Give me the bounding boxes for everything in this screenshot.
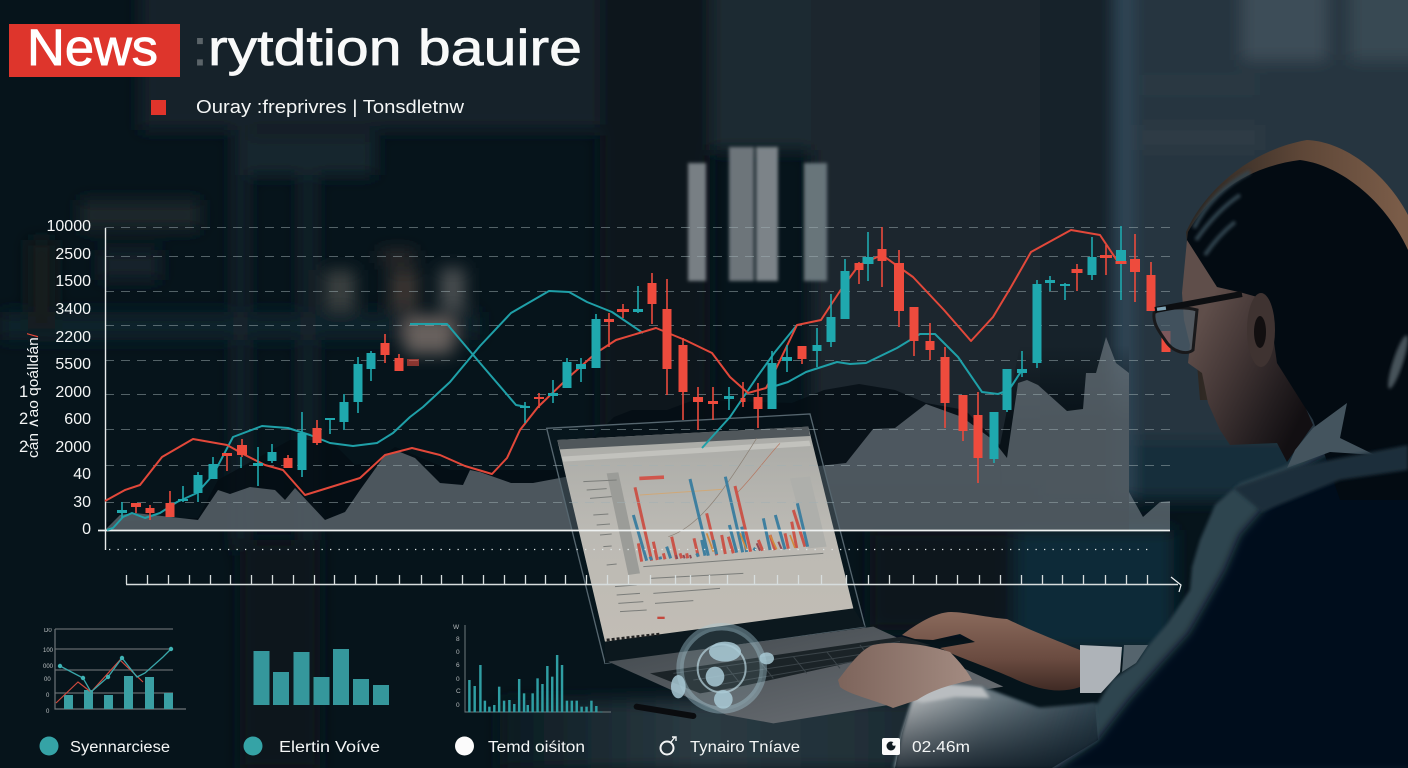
y axis labels: 2000 (55, 384, 91, 401)
laptop lid (547, 414, 865, 663)
mini chart: volume bars (254, 649, 389, 705)
y axis labels: 600 (64, 411, 91, 428)
glasses (1154, 294, 1242, 353)
mini chart: thin bars: 6 (456, 662, 460, 669)
mini chart: mixed bars and lines: 00 (44, 677, 51, 683)
y axis labels: 5500 (55, 356, 91, 373)
dark chart shadow area (105, 345, 1129, 530)
teal candle bodies (117, 250, 1126, 513)
red trend line (105, 230, 1118, 501)
ponytail highlight (1385, 334, 1408, 390)
legend item 3 (455, 736, 585, 756)
y axis labels: 2000 (55, 439, 91, 456)
laptop screen (557, 427, 853, 642)
legend (40, 736, 970, 756)
mini chart: thin bars: W (453, 624, 460, 631)
red candle bodies (131, 249, 1170, 517)
faded candle (407, 359, 419, 366)
person: blazer and sleeve (892, 400, 1408, 768)
y axis labels: 40 (73, 466, 91, 483)
laptop (547, 414, 1003, 723)
y axis labels: 0 (82, 521, 91, 538)
shoulder edge (1233, 445, 1408, 512)
decorative books on shelf (688, 147, 827, 281)
grey area chart (105, 337, 1170, 530)
mini chart: thin bars: 0 (456, 676, 460, 683)
mini chart: thin bars: 0 (456, 649, 460, 656)
y axis labels: 2500 (55, 246, 91, 263)
mini chart: thin bars: C (456, 688, 461, 695)
front hand (838, 643, 972, 708)
rotated axis title: 1 (19, 383, 28, 401)
back hand (902, 612, 1080, 691)
mini chart: mixed bars and lines: 0 (46, 709, 50, 715)
legend item 5: 02.46m (912, 739, 970, 756)
y axis labels: 10000 (46, 218, 91, 235)
bar chart on screen (633, 477, 808, 562)
person: head and glasses (1154, 140, 1408, 512)
rotated axis title (19, 332, 42, 458)
hands typing (838, 612, 1148, 708)
mini chart: mixed bars and lines: 0 (46, 693, 50, 699)
legend item 5 (882, 738, 970, 756)
legend item 4: Tynairo Tníave (690, 739, 800, 756)
screen text lines (583, 480, 823, 612)
glowing ring icon (671, 627, 774, 710)
hair (1187, 160, 1408, 500)
time axis ruler (126, 575, 1181, 592)
y axis labels (46, 218, 91, 538)
chart gridlines (105, 228, 1170, 502)
subtitle: Ouray :freprivres | Tonsdletnw (196, 97, 465, 117)
mini chart: mixed bars and lines: 000 (43, 664, 54, 670)
red candle wicks (136, 227, 1151, 520)
face and neck (1182, 240, 1313, 462)
mini chart: thin bars (453, 624, 611, 712)
headline: rytdtion bauire (208, 20, 582, 76)
y axis labels: 30 (73, 494, 91, 511)
legend item 2 (244, 736, 380, 756)
shirt cuff (1080, 645, 1122, 693)
y axis and baseline (98, 228, 1170, 550)
hair rim (1186, 140, 1408, 400)
hair highlights (1194, 172, 1250, 255)
sleeve cuff (895, 683, 1098, 768)
laptop base (608, 627, 1003, 723)
pen (637, 707, 693, 716)
keyboard (650, 637, 930, 693)
legend item 1 (40, 736, 170, 756)
mini chart: thin bars: 8 (456, 636, 460, 643)
mini chart: mixed bars and lines (43, 628, 186, 715)
legend item 1: Syennarciese (70, 739, 170, 756)
teal trend lines (107, 291, 1022, 530)
mini chart: mixed bars and lines: D0 (44, 628, 52, 634)
y axis labels: 2200 (55, 329, 91, 346)
header (9, 19, 582, 117)
y axis labels: 1500 (55, 273, 91, 290)
y axis labels: 3400 (55, 301, 91, 318)
collar (1287, 403, 1375, 468)
news badge: News (27, 19, 158, 76)
mini chart: mixed bars and lines: 100 (43, 648, 54, 654)
mini chart: thin bars: 0 (456, 702, 460, 709)
candlesticks (117, 226, 1170, 520)
rotated axis title: cán ∧ao qoálldán/ (26, 332, 42, 458)
legend item 4 (660, 737, 800, 756)
arrow head (1171, 577, 1181, 592)
rotated axis title: 2 (19, 438, 28, 456)
legend item 3: Temd oiśiton (488, 739, 585, 756)
headline: : (193, 20, 207, 76)
legend item 2: Elertin Voíve (279, 739, 380, 756)
rotated axis title: 2 (19, 410, 28, 428)
teal candle wicks (122, 226, 1121, 518)
ear (1247, 293, 1275, 367)
